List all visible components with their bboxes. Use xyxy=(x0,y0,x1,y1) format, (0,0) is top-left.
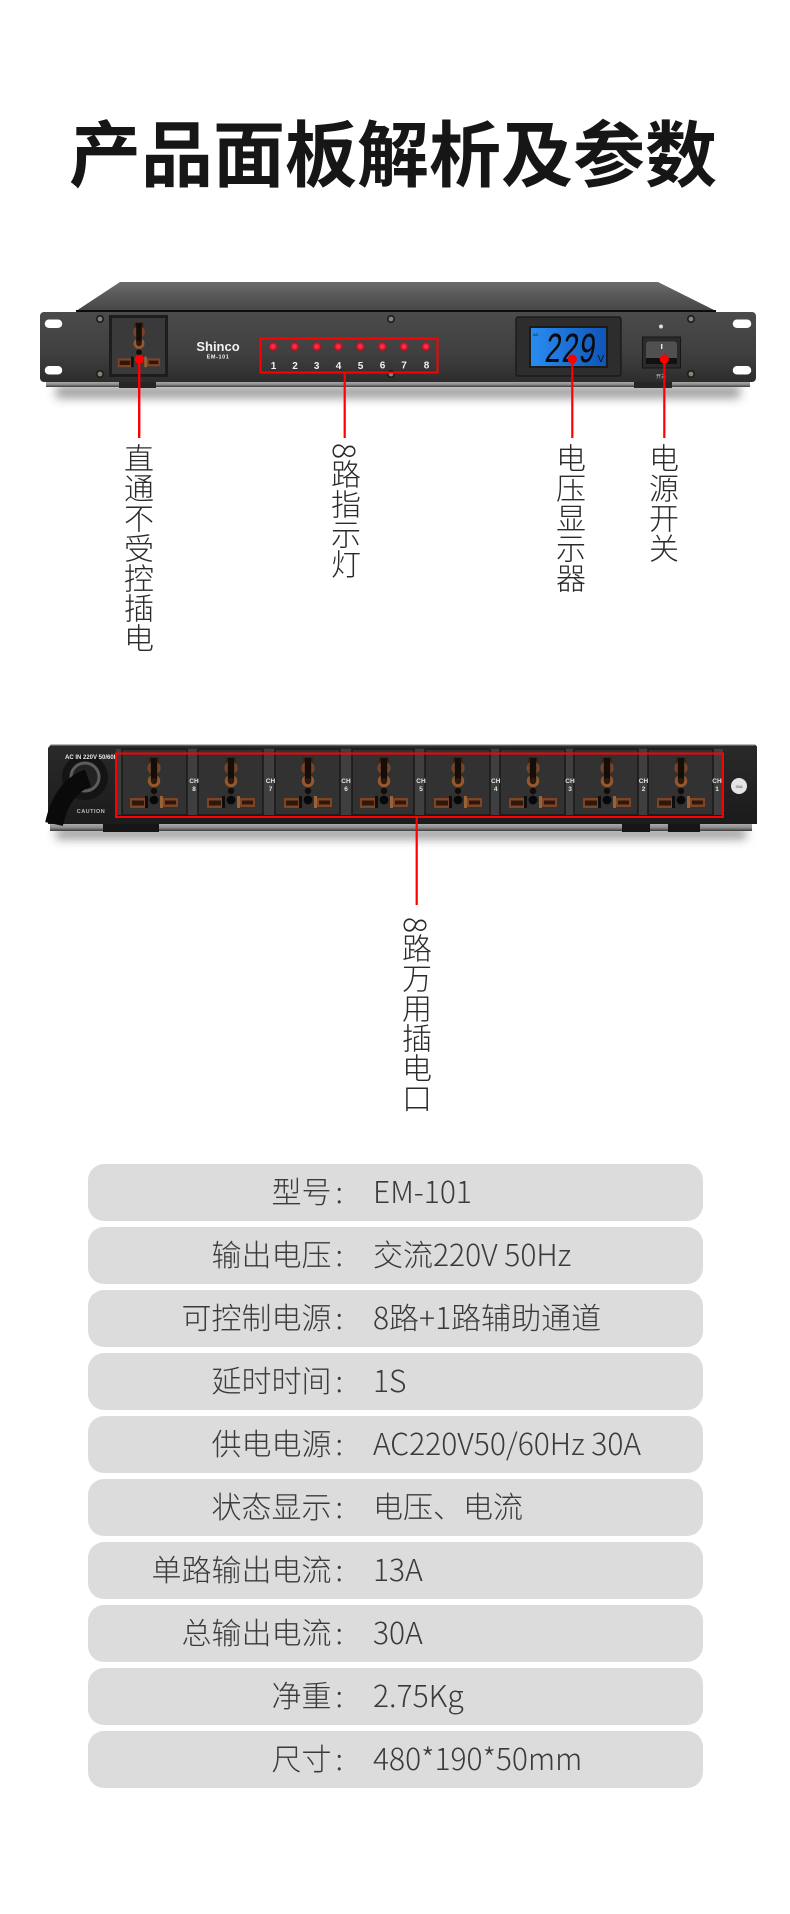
channel labels: 8 xyxy=(192,786,196,793)
spec row: single channel current xyxy=(88,1542,703,1599)
spec row: power supply xyxy=(88,1416,703,1473)
power switch xyxy=(642,324,680,380)
channel labels: CH xyxy=(639,778,648,785)
panel screws xyxy=(97,316,694,377)
spec row: controllable power xyxy=(88,1290,703,1347)
channel labels: 5 xyxy=(419,786,423,793)
spec row: dimensions xyxy=(88,1731,703,1788)
cast shadow under rear unit xyxy=(56,828,746,839)
eight LED indicators: 5 xyxy=(358,361,364,372)
spec row: model: EM-101 xyxy=(373,1168,472,1212)
channel labels: 6 xyxy=(344,786,348,793)
channel labels: CH xyxy=(712,778,722,785)
rear view of power sequencer xyxy=(48,744,757,839)
eight LED indicators: 2 xyxy=(292,361,298,372)
spec row: model: 型号: xyxy=(272,1168,343,1212)
brand logo: EM-101 xyxy=(207,354,229,360)
spec row: total current: 30A xyxy=(373,1609,423,1653)
title: 产品面板解析及参数 xyxy=(69,97,717,202)
rear lip xyxy=(50,823,752,831)
channel labels: CH xyxy=(565,778,575,785)
front panel with rack ears xyxy=(40,312,756,382)
spec row: status display xyxy=(88,1479,703,1536)
voltage display: AC xyxy=(533,332,539,337)
callout: outlets frame xyxy=(116,754,723,905)
label: unswitched outlet: 直通不受控插电 xyxy=(117,443,161,653)
spec row: dimensions: 480*190*50mm xyxy=(373,1735,582,1779)
label: 8 channel universal outlets: 8路万用插电口 xyxy=(395,917,439,1113)
eight LED indicators: 4 xyxy=(336,361,342,372)
certification sticker: 30A xyxy=(735,784,743,789)
channel labels: 1 xyxy=(715,786,719,793)
spec row: output voltage: 输出电压: xyxy=(212,1231,343,1275)
channel labels: CH xyxy=(266,778,275,785)
eight LED indicators: 6 xyxy=(380,360,386,372)
channel labels xyxy=(189,778,722,793)
spec row: delay time: 延时时间: xyxy=(212,1357,343,1401)
unswitched outlet xyxy=(109,315,168,377)
power cord and inlet: CAUTION xyxy=(77,809,105,815)
top lid xyxy=(76,282,716,311)
channel labels: 2 xyxy=(642,786,646,793)
spec row: single channel current: 单路输出电流: xyxy=(152,1546,343,1590)
spec row: total current xyxy=(88,1605,703,1662)
eight universal outlets xyxy=(116,749,723,815)
feet xyxy=(119,380,672,388)
label: voltage display: 电压显示器 xyxy=(549,443,593,593)
power switch: 开关 xyxy=(656,373,666,380)
channel labels: CH xyxy=(491,778,501,785)
eight LED indicators: 7 xyxy=(401,360,407,372)
callout: power switch marker xyxy=(660,354,669,438)
rear feet xyxy=(103,823,700,832)
voltage display: V xyxy=(598,354,604,365)
spec row: single channel current: 13A xyxy=(373,1546,423,1590)
channel labels: 4 xyxy=(494,786,498,793)
channel labels: 7 xyxy=(269,786,273,793)
channel labels: CH xyxy=(416,778,426,785)
spec row: net weight xyxy=(88,1668,703,1725)
brand logo: Shinco xyxy=(196,339,240,354)
spec row: status display: 状态显示: xyxy=(212,1483,343,1527)
spec row: net weight: 净重: xyxy=(272,1672,343,1716)
brand logo xyxy=(196,339,240,360)
spec row: model xyxy=(88,1164,703,1221)
eight LED indicators xyxy=(269,342,430,372)
spec row: power supply: 供电电源: xyxy=(212,1420,343,1464)
voltage display: 229 xyxy=(545,326,596,375)
front view of power sequencer xyxy=(40,282,756,398)
eight LED indicators: 3 xyxy=(314,361,320,372)
eight LED indicators: 1 xyxy=(271,361,277,372)
spec row: delay time xyxy=(88,1353,703,1410)
spec row: power supply: AC220V50/60Hz 30A xyxy=(373,1420,641,1464)
certification sticker xyxy=(731,778,747,794)
voltage display xyxy=(516,317,621,376)
spec row: status display: 电压、电流 xyxy=(373,1483,523,1527)
callout: LED indicator frame xyxy=(260,338,438,438)
channel labels: CH xyxy=(341,778,351,785)
spec row: net weight: 2.75Kg xyxy=(373,1672,464,1716)
power cord and inlet xyxy=(54,754,121,824)
bottom lip xyxy=(46,381,750,387)
spec row: output voltage xyxy=(88,1227,703,1284)
spec row: total current: 总输出电流: xyxy=(182,1609,343,1653)
channel labels: 3 xyxy=(568,786,572,793)
eight LED indicators: 8 xyxy=(424,360,430,372)
label: 8 channel indicators: 8路指示灯 xyxy=(324,443,368,579)
spec row: delay time: 1S xyxy=(373,1357,406,1401)
rear chassis xyxy=(48,744,757,824)
callout: voltage display marker xyxy=(568,354,577,438)
label: power switch: 电源开关 xyxy=(642,443,686,563)
spec row: dimensions: 尺寸: xyxy=(272,1735,343,1779)
cast shadow under front unit xyxy=(56,386,740,398)
spec row: output voltage: 交流220V 50Hz xyxy=(373,1231,571,1275)
callout: unswitched outlet marker xyxy=(135,355,144,438)
power cord and inlet: AC IN 220V 50/60Hz xyxy=(65,755,121,761)
spec row: controllable power: 8路+1路辅助通道 xyxy=(373,1294,601,1338)
spec row: controllable power: 可控制电源: xyxy=(182,1294,343,1338)
channel labels: CH xyxy=(189,778,199,785)
